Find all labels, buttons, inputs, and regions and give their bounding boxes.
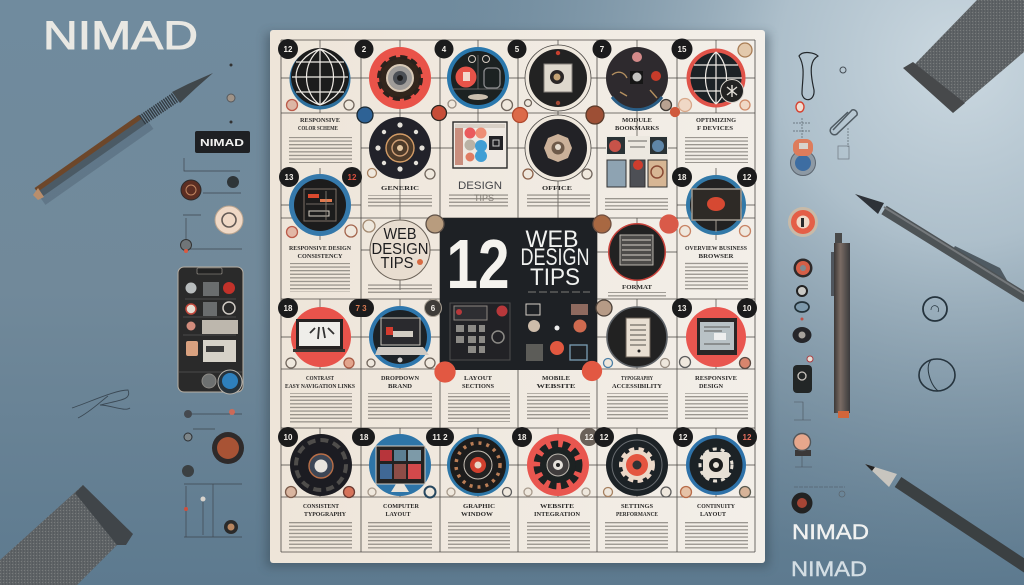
icon: octagon (525, 115, 591, 181)
tip text: row 4 column 5: SETTINGS (621, 504, 654, 510)
badges: numbers: 6 (431, 304, 436, 313)
tip text: column 5: MODULE (622, 118, 652, 124)
tip text: row 4 column 3 (448, 504, 510, 549)
tip text: lines panel card (608, 285, 666, 297)
heading: WEB DESIGN TIPS: WEB (526, 226, 578, 253)
tip text: column 1 row 1: COLOR SCHEME (298, 126, 338, 132)
tag: NIMAD: NIMAD (200, 137, 245, 149)
tip text: row 4 column 1: CONSISTENT (303, 504, 339, 510)
tip text: row 3 column 6: DESIGN (699, 384, 724, 390)
icon: paper (607, 307, 667, 367)
badges: numbers: 10 (743, 304, 752, 313)
phone mockup (178, 267, 243, 394)
rings (919, 297, 955, 391)
tip text: row 3 column 1 (285, 376, 356, 423)
logos: NIMAD bottom right (791, 521, 869, 581)
icon: dark shield (290, 434, 352, 496)
card image: colour balloons (453, 122, 507, 168)
pencil left (33, 73, 213, 200)
badges: numbers: 11 2 (432, 433, 448, 442)
icon: dark scatter (606, 47, 668, 110)
badges: numbers: 12 (743, 433, 752, 442)
tip text: column 6 row 1 (685, 118, 748, 163)
tip text: row 4 column 4: INTEGRATION (534, 512, 581, 518)
icon: red ring globe (686, 48, 746, 108)
badges: numbers: 18 (360, 433, 369, 442)
icon: WEB DESIGN TIPS badge: DESIGN (372, 241, 428, 258)
tip text: column 6 row 1: F DEVICES (697, 126, 734, 132)
tip text: row 3 column 2: DROPDOWN (381, 376, 420, 382)
tip text: column 5 (605, 118, 668, 210)
tip text: row 4 column 2 (368, 504, 432, 549)
tip text: row 4 column 1 (289, 504, 352, 549)
tip text: column 1 row 2: RESPONSIVE DESIGN (289, 246, 352, 252)
tip text: row 3 column 1: CONTRAST (306, 376, 334, 382)
icon: red monitor small (686, 307, 746, 367)
tip text: column 5: BOOKMARKS (615, 126, 660, 132)
icon: dial (447, 434, 509, 496)
tip text: row 3 column 3 (448, 376, 510, 422)
icon: red gear (369, 47, 431, 109)
icon: WEB DESIGN TIPS badge: TIPS (380, 255, 414, 272)
badges: numbers: 15 (678, 45, 687, 54)
badges: numbers: 13 (285, 173, 294, 182)
tip text: web design tips card (368, 283, 432, 294)
center UI icons (450, 292, 590, 361)
tip text: row 3 column 1: EASY NAVIGATION LINKS (285, 384, 356, 390)
tip text: row 4 column 3: GRAPHIC (463, 504, 495, 510)
icon: laptop (369, 306, 431, 368)
tip text: column 4 (527, 186, 590, 207)
tall pen (831, 233, 850, 418)
badges: numbers: 12 (348, 173, 357, 182)
badges: numbers (278, 38, 757, 447)
tip text: column 1 row 2: CONSISTENCY (298, 254, 343, 260)
tip text: column 1 row 1 (289, 118, 352, 163)
tip text: lines panel card: FORMAT (622, 285, 652, 291)
tip text: row 4 column 5 (605, 504, 668, 549)
icon: globe 1 (290, 48, 350, 110)
tip text: row 4 column 4 (527, 504, 590, 549)
tip text: column 1 row 1: RESPONSIVE (300, 118, 340, 124)
tip text: row 4 column 5: PERFORMANCE (616, 512, 658, 518)
tip text: row 3 column 3: LAYOUT (464, 376, 492, 382)
badges: numbers: 2 (362, 45, 367, 54)
tip text: row 4 column 6: CONTINUITY (697, 504, 736, 510)
panel: main board (266, 30, 769, 567)
badges: numbers: 10 (284, 433, 293, 442)
tip text: row 3 column 2 (368, 376, 432, 420)
badges: numbers: 7 3 (355, 304, 367, 313)
tip text: row 3 column 5: ACCESSIBILITY (612, 384, 663, 390)
card image: tiles (606, 136, 668, 187)
tag: NIMAD (195, 131, 250, 153)
tip text: row 3 column 2: BRAND (388, 384, 413, 390)
tip text: column 1 row 2 (289, 246, 352, 292)
tip text: row 3 column 6 (685, 376, 748, 420)
logos: NIMAD bottom right: NIMAD (792, 521, 869, 544)
icon: square frame (525, 45, 591, 111)
badges: numbers: 5 (515, 45, 520, 54)
tip text: column 4: OFFICE (542, 186, 572, 192)
tip text: row 4 column 6 (685, 504, 748, 549)
roller top right (903, 0, 1024, 113)
badges: numbers: 7 (600, 45, 605, 54)
icon: WEB DESIGN TIPS badge (370, 220, 430, 280)
tip text: row 4 column 3: WINDOW (461, 512, 493, 518)
badges: numbers: 12 (600, 433, 609, 442)
left column small icons (180, 64, 244, 537)
icon: blue ring white gear (686, 435, 746, 495)
icon: lines panel (608, 223, 666, 281)
icon: dark swirl (369, 117, 431, 179)
badges: numbers: 12 (679, 433, 688, 442)
tip text: row 4 column 2: LAYOUT (386, 512, 410, 518)
tip text: row 3 column 4 (527, 376, 590, 420)
heading: WEB DESIGN TIPS: TIPS (530, 264, 580, 291)
tip text: row 3 column 5: TYPOGRAPHY (621, 376, 653, 382)
tip text: design tips: DESIGN (458, 180, 502, 192)
pen bottom right (865, 464, 1024, 568)
tip text: column 6 row 2 (685, 246, 748, 290)
swirl icons (286, 43, 752, 498)
heading: WEB DESIGN TIPS: DESIGN (520, 244, 590, 271)
badges: numbers: 18 (284, 304, 293, 313)
badges: numbers: 18 (678, 173, 687, 182)
icon: WEB DESIGN TIPS badge: WEB (384, 226, 416, 243)
icon: blue ring diagram (289, 174, 351, 236)
icon: tile monitor (369, 434, 431, 496)
tip text: design tips: TIPS (474, 193, 494, 203)
badges: numbers: 12 (585, 433, 594, 442)
tip text: column 2 generic (368, 186, 432, 208)
tip text: row 4 column 4: WEBSITE (540, 504, 574, 510)
panel: center title (440, 218, 597, 370)
logo: NIMAD top left: NIMAD (43, 14, 198, 58)
tip text: column 6 row 2: BROWSER (698, 254, 734, 260)
tip text: row 3 column 4: MOBILE (542, 376, 570, 382)
roller bottom left (0, 485, 133, 585)
right column small icons (788, 53, 857, 514)
badges: numbers: 4 (442, 45, 447, 54)
badges: numbers: 18 (518, 433, 527, 442)
badges: numbers: 13 (678, 304, 687, 313)
tip text: column 2 generic: GENERIC (381, 186, 419, 192)
squiggle (72, 390, 130, 418)
tip text: row 3 column 6: RESPONSIVE (695, 376, 737, 382)
tip text: row 3 column 4: WEBSITE (536, 384, 576, 390)
pen top right (855, 194, 1024, 298)
tip text: column 6 row 2: OVERVIEW BUSINESS (685, 246, 748, 252)
tip text: design tips (449, 180, 508, 207)
logos: NIMAD bottom right: NIMAD (791, 558, 867, 581)
icon: red monitor (291, 307, 351, 367)
tip text: row 4 column 6: LAYOUT (700, 512, 726, 518)
tip text: row 4 column 1: TYPOGRAPHY (304, 512, 347, 518)
number 12: 12 (446, 225, 510, 303)
icon: blue ring panels (447, 47, 509, 109)
tip text: row 3 column 5 (607, 376, 668, 420)
badges: numbers: 12 (743, 173, 752, 182)
badges: numbers: 12 (284, 45, 293, 54)
icon: white red gear (606, 434, 668, 496)
tip text: column 6 row 1: OPTIMIZING (696, 118, 736, 124)
tip text: row 4 column 2: COMPUTER (383, 504, 420, 510)
icon: monitor with red shape (686, 175, 746, 235)
tip text: row 3 column 3: SECTIONS (462, 384, 495, 390)
icon: red gear black (527, 434, 589, 496)
grid lines (281, 40, 755, 552)
